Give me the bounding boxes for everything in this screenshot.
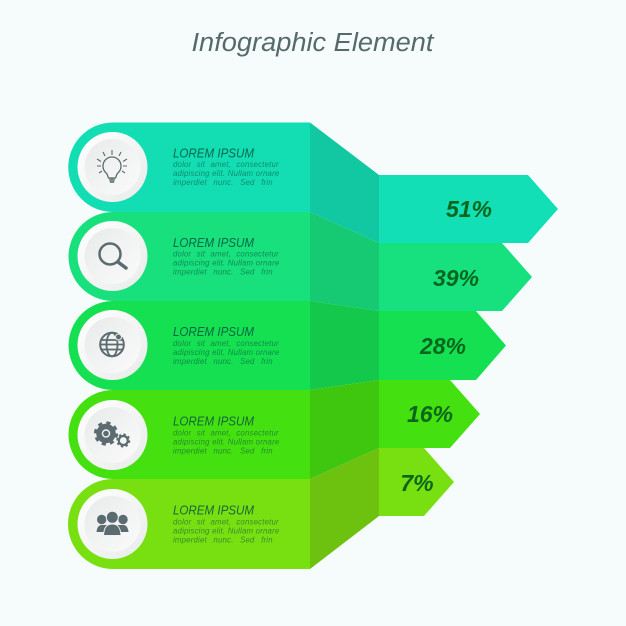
text block: adipiscing elit. Nullam ornare (173, 258, 280, 268)
text block: imperdiet nunc. Sed frin (173, 536, 273, 544)
fold connecting rows to arrows (310, 122, 379, 569)
icon: people (78, 489, 148, 559)
arrow: 39% (379, 243, 532, 311)
text block: imperdiet nunc. Sed frin (173, 446, 273, 455)
panel: row 3 (69, 301, 310, 390)
text block: LOREM IPSUM (173, 325, 255, 339)
icon: globe (78, 310, 148, 380)
text block (173, 146, 280, 187)
text block: LOREM IPSUM (173, 236, 255, 250)
arrow: 51%: 51% (446, 196, 492, 222)
panel: row 2 (69, 212, 310, 301)
text block: adipiscing elit. Nullam ornare (173, 348, 280, 357)
text block: imperdiet nunc. Sed frin (173, 268, 273, 276)
icon: light bulb (78, 132, 148, 202)
panel: row 5 (68, 479, 310, 569)
text block (173, 504, 280, 544)
arrow: 51% (379, 175, 558, 243)
arrow: 7% (379, 448, 454, 516)
text block: LOREM IPSUM (173, 414, 255, 428)
arrow: 16% (379, 380, 480, 448)
text block (173, 414, 280, 455)
text block: adipiscing elit. Nullam ornare (173, 437, 280, 446)
text block: dolor sit amet, consectetur (173, 250, 279, 258)
text block: LOREM IPSUM (173, 504, 255, 518)
icon: gears (78, 400, 148, 470)
arrow: 28% (379, 311, 506, 380)
arrow: 7%: 7% (400, 470, 434, 496)
text block (173, 325, 280, 366)
text block: adipiscing elit. Nullam ornare (173, 169, 280, 178)
arrow: 16%: 16% (407, 401, 453, 427)
text block: adipiscing elit. Nullam ornare (173, 526, 280, 536)
text block: imperdiet nunc. Sed frin (173, 357, 273, 366)
text block: dolor sit amet, consectetur (173, 160, 279, 169)
title: Infographic Element (192, 29, 434, 57)
icon: magnifier (78, 221, 148, 291)
panel: row 4 (69, 390, 310, 479)
panel: row 1 (68, 122, 310, 212)
text block: LOREM IPSUM (173, 146, 255, 160)
text block: dolor sit amet, consectetur (173, 428, 279, 437)
text block: dolor sit amet, consectetur (173, 518, 279, 526)
text block: dolor sit amet, consectetur (173, 339, 279, 348)
arrow: 28%: 28% (419, 333, 466, 359)
text block: imperdiet nunc. Sed frin (173, 178, 273, 187)
arrow: 39%: 39% (433, 265, 479, 291)
text block (173, 236, 280, 276)
